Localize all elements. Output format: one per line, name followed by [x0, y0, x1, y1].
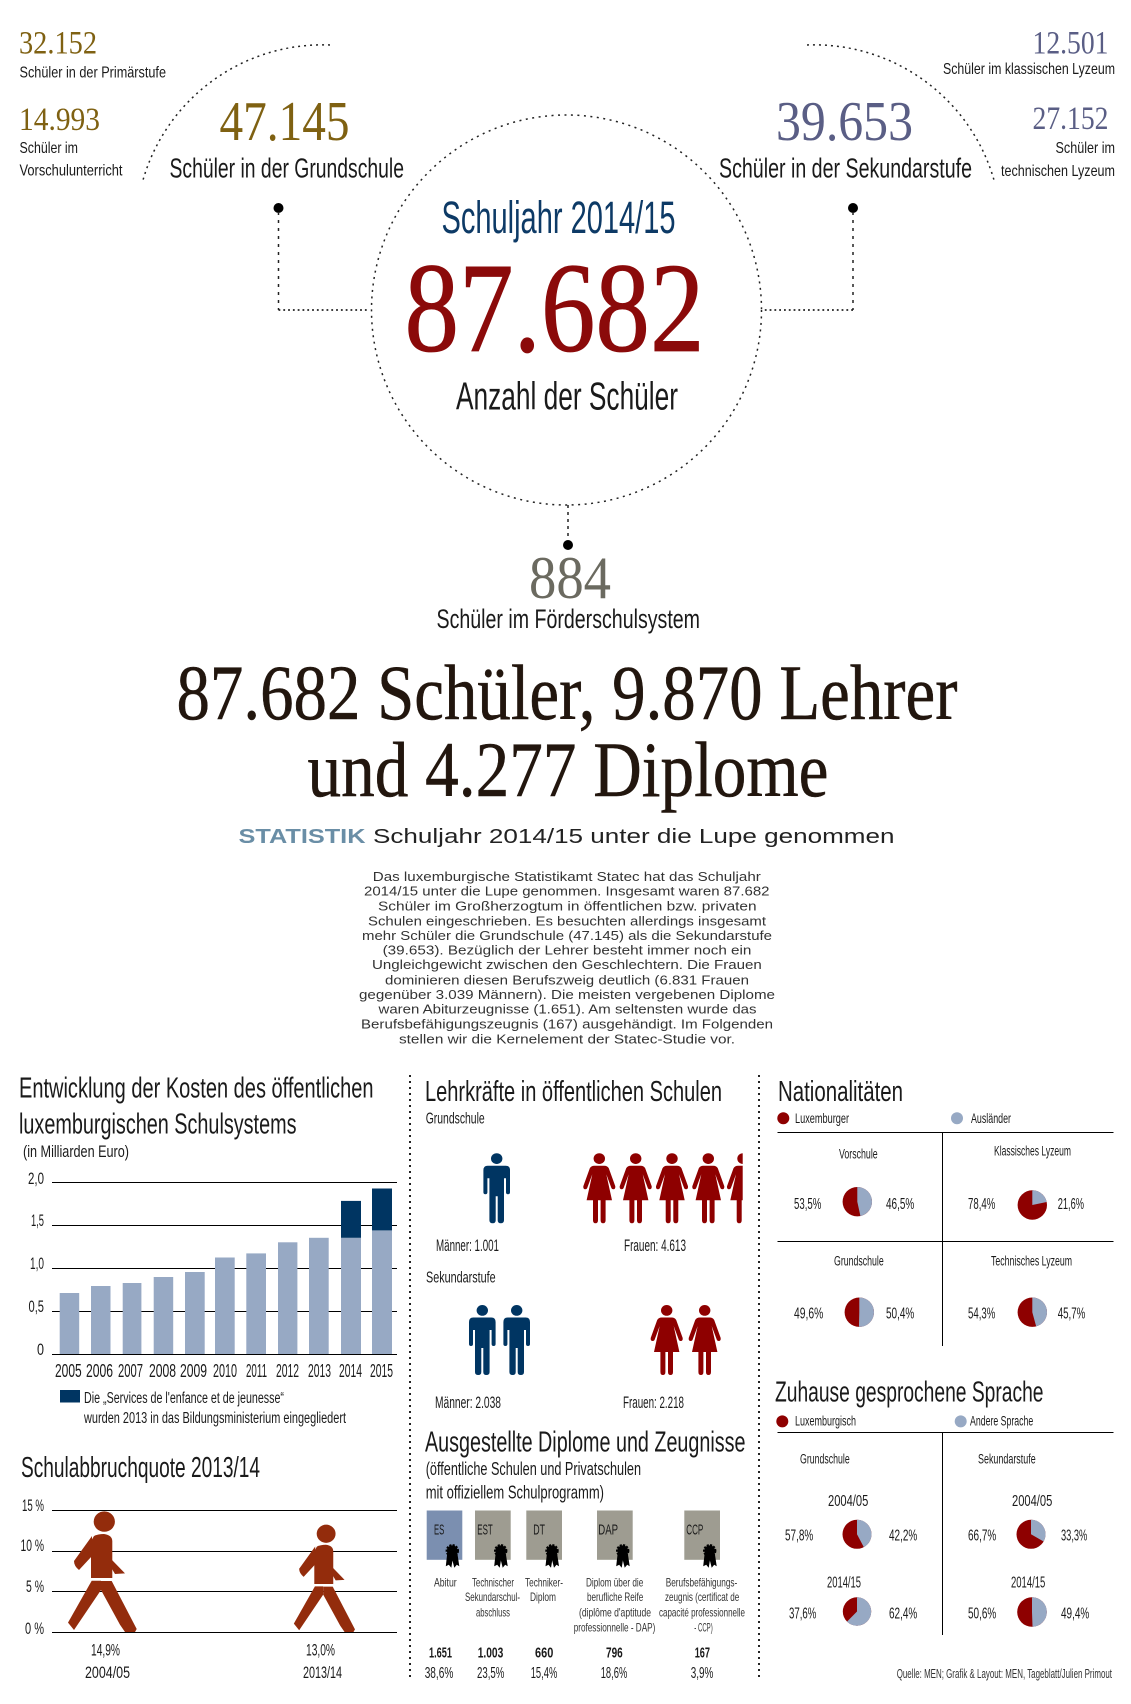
diploma descriptions: berufliche Reife: [587, 1590, 644, 1604]
pie: Grundschule 2014/15: [789, 1574, 917, 1626]
intro text: [359, 870, 775, 1046]
pie: Sekundarstufe 2014/15: 50,6%: [968, 1606, 996, 1622]
intro text: stellen wir die Kernelement der Statec-Studie vor.: [399, 1032, 735, 1046]
Sekundarstufe label: Schüler in der Sekundarstufe: [719, 152, 972, 184]
heading: teachers: Lehrkräfte in öffentlichen Schulen: [425, 1076, 722, 1108]
intro text: Ungleichgewicht zwischen den Geschlechtern. Die Frauen: [372, 958, 762, 972]
panel: Grundschule sub-counts: [19, 26, 166, 180]
diploma descriptions: Technischer: [472, 1576, 514, 1590]
pie: Technisches Lyzeum: 54,3%: [968, 1306, 995, 1323]
label: secondary women: Frauen: 2.218: [623, 1393, 684, 1412]
pie: Sekundarstufe 2014/15: 2014/15: [1011, 1574, 1045, 1591]
legend: nationalities: [777, 1111, 1011, 1126]
x axis years: [55, 1361, 393, 1381]
x axis years: 2011: [246, 1361, 267, 1381]
legend: home language: Luxemburgisch: [795, 1414, 856, 1428]
icon: primary men: [483, 1153, 510, 1223]
classical lyceum count: 12.501: [1032, 26, 1108, 62]
pie: Technisches Lyzeum: Technisches Lyzeum: [991, 1254, 1072, 1269]
legend: nationalities: Ausländer: [971, 1111, 1011, 1126]
chart legend: Die „Services de l'enfance et de jeunesse“: [84, 1390, 284, 1407]
pie: Sekundarstufe 2004/05: 66,7%: [968, 1528, 996, 1544]
chart legend: wurden 2013 in das Bildungsministerium eingegliedert: [83, 1410, 346, 1427]
pie: Vorschule: [794, 1147, 914, 1216]
subheadline: Schuljahr 2014/15 unter die Lupe genommen: [373, 825, 894, 848]
diploma shares: 18,6%: [601, 1665, 627, 1682]
dropout axis: [20, 1496, 397, 1638]
arc: right dotted: [807, 45, 994, 180]
heading: dropout: Schulabbruchquote 2013/14: [21, 1452, 260, 1484]
legend: nationalities: Luxemburger: [795, 1111, 849, 1126]
heading: diplomas: Ausgestellte Diplome und Zeugnisse: [425, 1426, 746, 1458]
bars: [60, 1188, 392, 1354]
pie: Grundschule 2014/15: 37,6%: [789, 1606, 816, 1622]
pie: Sekundarstufe 2004/05: [968, 1493, 1087, 1549]
legend: home language: [776, 1414, 1033, 1428]
subheadline: STATISTIK: [238, 825, 366, 848]
subheading: Sekundarstufe: Sekundarstufe: [978, 1452, 1036, 1467]
subheading: primary: Grundschule: [426, 1111, 485, 1128]
diploma descriptions: [434, 1576, 745, 1635]
icon: certificate DT: [526, 1510, 562, 1568]
intro text: (39.653). Bezüglich der Lehrer besteht immer noch ein: [383, 944, 751, 958]
y axis: 0: [37, 1340, 44, 1359]
heading: nationalities: Nationalitäten: [778, 1076, 903, 1108]
dropout values: 2004/05: [85, 1663, 130, 1682]
icon: certificate CCP: [684, 1510, 720, 1568]
connector: bottom: [563, 505, 573, 550]
dropout values: 14,9%: [91, 1640, 120, 1660]
note: diplomas: mit offiziellem Schulprogramm): [426, 1483, 604, 1503]
x axis years: 2007: [118, 1361, 143, 1381]
y axis: [28, 1169, 397, 1359]
diploma counts: 660: [535, 1646, 553, 1662]
intro text: gegenüber 3.039 Männern). Die meisten vergebenen Diplome: [359, 988, 775, 1002]
technical lyceum count: 27.152: [1032, 101, 1108, 137]
icon: certificate CCP: CCP: [686, 1521, 703, 1538]
Grundschule total: 47.145: [220, 91, 350, 153]
icon: walking figure 2013/14: [294, 1525, 355, 1632]
diploma shares: 38,6%: [425, 1665, 453, 1682]
diploma shares: 3,9%: [691, 1665, 713, 1682]
y axis: 1,0: [30, 1254, 44, 1273]
x axis years: 2005: [55, 1361, 82, 1381]
icon: certificate ES: ES: [434, 1521, 444, 1538]
central dotted circle: [372, 115, 762, 505]
pie: Grundschule: 50,4%: [886, 1306, 914, 1323]
pie: Vorschule: Vorschule: [839, 1147, 878, 1162]
diploma counts: [429, 1646, 710, 1662]
icon: certificate DAP: [597, 1510, 633, 1568]
intro text: 2014/15 unter die Lupe genommen. Insgesamt waren 87.682: [364, 884, 770, 898]
intro text: Das luxemburgische Statistikamt Statec hat das Schuljahr: [373, 870, 761, 884]
central number: 87.682: [404, 237, 704, 379]
pie: Technisches Lyzeum: 45,7%: [1058, 1306, 1085, 1323]
preschool count: 14.993: [19, 102, 100, 138]
intro text: Schüler im Großherzogtum in öffentlichen bzw. privaten: [378, 899, 757, 913]
pie: Grundschule 2004/05: 57,8%: [785, 1528, 813, 1544]
panel: teachers: [425, 1076, 759, 1412]
heading: costs line 2: luxemburgischen Schulsystems: [19, 1108, 296, 1140]
intro text: waren Abiturzeugnisse (1.651). Am seltensten wurde das: [377, 1002, 756, 1016]
arc: left dotted: [143, 45, 330, 180]
diploma descriptions: - CCP): [694, 1621, 713, 1635]
icon: certificate EST: [475, 1510, 511, 1568]
technical lyceum label: Schüler im: [1056, 140, 1115, 157]
central year: Schuljahr 2014/15: [442, 192, 676, 243]
intro text: mehr Schüler die Grundschule (47.145) als die Sekundarstufe: [362, 929, 772, 943]
note: diplomas: (öffentliche Schulen und Privatschulen: [426, 1459, 641, 1479]
pie: Grundschule: [794, 1254, 914, 1327]
subheading: Grundschule: Grundschule: [800, 1452, 850, 1467]
dropout axis: 0 %: [25, 1619, 44, 1638]
connector: left: [274, 203, 368, 310]
preschool label line 2: Vorschulunterricht: [20, 163, 123, 180]
subheading: secondary: Sekundarstufe: [426, 1270, 496, 1287]
icon: secondary men: [469, 1305, 530, 1375]
diploma descriptions: professionnelle - DAP): [574, 1621, 655, 1635]
label: primary men: Männer: 1.001: [436, 1236, 499, 1255]
diploma descriptions: zeugnis (certificat de: [665, 1590, 740, 1604]
panel: costs chart: [19, 1072, 397, 1427]
diploma descriptions: Diplom über die: [586, 1576, 644, 1590]
diploma shares: [425, 1665, 713, 1682]
pie: Vorschule: 53,5%: [794, 1196, 821, 1213]
pie: Vorschule: 46,5%: [886, 1196, 914, 1213]
pie: Sekundarstufe 2004/05: 2004/05: [1012, 1493, 1052, 1510]
Grundschule label: Schüler in der Grundschule: [170, 152, 404, 184]
label: primary women: Frauen: 4.613: [624, 1236, 686, 1255]
x axis years: 2009: [180, 1361, 207, 1381]
dropout values: [85, 1640, 342, 1682]
dropout axis: 10 %: [20, 1536, 44, 1555]
x axis years: 2015: [370, 1361, 393, 1381]
special-needs label: Schüler im Förderschulsystem: [436, 604, 700, 634]
intro text: Schulen eingeschrieben. Es besuchten allerdings insgesamt: [368, 914, 767, 928]
pie: Klassisches Lyzeum: 78,4%: [968, 1196, 995, 1213]
diploma descriptions: Diplom: [530, 1590, 556, 1604]
diploma descriptions: Sekundarschul-: [465, 1590, 520, 1604]
pie: Klassisches Lyzeum: Klassisches Lyzeum: [994, 1144, 1071, 1159]
label: secondary men: Männer: 2.038: [435, 1393, 501, 1412]
chart legend: [60, 1390, 346, 1427]
dropout values: 2013/14: [303, 1663, 342, 1682]
icon: walking figure 2004/05: [68, 1511, 137, 1632]
diploma counts: 167: [695, 1646, 710, 1662]
diploma descriptions: abschluss: [476, 1606, 510, 1620]
pie: Klassisches Lyzeum: 21,6%: [1058, 1196, 1084, 1213]
note: diplomas: [426, 1459, 641, 1503]
x axis years: 2014: [339, 1361, 362, 1381]
pie: Grundschule: Grundschule: [834, 1254, 884, 1269]
Sekundarstufe total: 39.653: [776, 91, 913, 153]
panel: home language: [775, 1376, 1113, 1635]
intro text: Berufsbefähigungszeugnis (167) ausgehändigt. Im Folgenden: [361, 1018, 773, 1032]
headline: und 4.277 Diplome: [308, 726, 828, 813]
diploma descriptions: Techniker-: [525, 1576, 563, 1590]
pie: Grundschule 2004/05: [785, 1493, 917, 1549]
icon: certificate DAP: DAP: [598, 1521, 618, 1538]
y axis: 2,0: [28, 1169, 44, 1188]
x axis years: 2010: [213, 1361, 237, 1381]
intro text: dominieren diesen Berufszweig deutlich (6.831 Frauen: [385, 974, 749, 988]
pie: Grundschule: 49,6%: [794, 1306, 823, 1323]
pie: Grundschule 2014/15: 62,4%: [889, 1606, 917, 1622]
diploma counts: 796: [606, 1646, 623, 1662]
special-needs count: 884: [529, 545, 611, 611]
icon: primary women: [583, 1153, 759, 1223]
icon: certificate ES: [427, 1510, 462, 1568]
legend: home language: Andere Sprache: [970, 1414, 1033, 1428]
y axis: 1,5: [31, 1211, 44, 1230]
primary school label: Schüler in der Primärstufe: [20, 64, 166, 82]
dropout axis: 15 %: [22, 1496, 44, 1515]
icon: certificate DT: DT: [533, 1521, 545, 1538]
pie: Sekundarstufe 2014/15: [968, 1574, 1089, 1627]
central label: Anzahl der Schüler: [456, 376, 678, 419]
headline: 87.682 Schüler, 9.870 Lehrer: [176, 649, 958, 736]
primary school count: 32.152: [19, 26, 97, 62]
pie: Technisches Lyzeum: [968, 1254, 1085, 1327]
pie: Grundschule 2004/05: 2004/05: [828, 1493, 868, 1510]
pie: Klassisches Lyzeum: [968, 1144, 1084, 1220]
headline: [176, 649, 958, 813]
icon: secondary women: [651, 1305, 721, 1375]
diploma descriptions: Abitur: [434, 1576, 457, 1590]
dropout axis: 5 %: [26, 1577, 44, 1596]
preschool label: Schüler im: [20, 140, 78, 157]
x axis years: 2012: [276, 1361, 299, 1381]
panel: dropout rate: [20, 1452, 397, 1682]
heading: costs: Entwicklung der Kosten des öffentlichen: [19, 1072, 374, 1104]
diploma shares: 15,4%: [531, 1665, 557, 1682]
diploma counts: 1.651: [429, 1646, 452, 1662]
panel: Sekundarstufe sub-counts: [943, 26, 1115, 180]
panel: nationalities: [777, 1076, 1113, 1346]
pie: Grundschule 2014/15: 2014/15: [827, 1574, 861, 1591]
diploma shares: 23,5%: [477, 1665, 504, 1682]
pie: Sekundarstufe 2004/05: 33,3%: [1061, 1528, 1087, 1544]
unit note: (in Milliarden Euro): [23, 1142, 129, 1161]
pie: Grundschule 2004/05: 42,2%: [889, 1528, 917, 1544]
diploma descriptions: (diplôme d'aptitude: [579, 1606, 651, 1620]
x axis years: 2008: [149, 1361, 176, 1381]
y axis: 0,5: [28, 1297, 44, 1316]
diploma descriptions: capacité professionnelle: [659, 1606, 745, 1620]
x axis years: 2013: [308, 1361, 331, 1381]
connector: right: [763, 203, 858, 310]
x axis years: 2006: [86, 1361, 113, 1381]
icon: certificate EST: EST: [477, 1521, 493, 1538]
subheadline: [238, 825, 894, 848]
pie: Sekundarstufe 2014/15: 49,4%: [1061, 1606, 1089, 1622]
diploma counts: 1.003: [478, 1646, 503, 1662]
dropout values: 13,0%: [306, 1640, 335, 1660]
diploma descriptions: Berufsbefähigungs-: [666, 1576, 737, 1590]
panel: diplomas: [425, 1426, 746, 1682]
